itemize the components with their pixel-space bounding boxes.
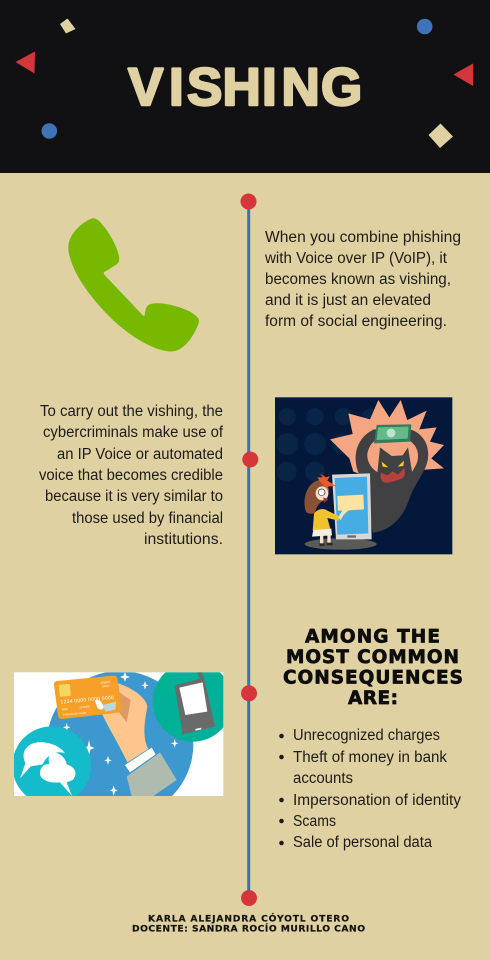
text block: how vishing works: voice that becomes credible (39, 467, 223, 484)
icon: blue circle left (42, 123, 57, 139)
text block: how vishing works: because it is very similar to (45, 488, 223, 505)
text block: how vishing works: cybercriminals make use of (43, 424, 224, 441)
illustration: scam monster behind phone (275, 397, 452, 554)
icon: red triangle left (16, 52, 35, 74)
illustration: hand holding credit card: CARDHOLDER NAME (62, 712, 87, 717)
heading: consequences: AMONG THE (305, 626, 440, 648)
monster head with ears (377, 447, 412, 490)
heading: consequences: MOST COMMON (286, 647, 459, 668)
list: consequences: Sale of personal data (293, 834, 432, 851)
list: consequences (279, 727, 461, 851)
illustration: hand holding credit card: 1234 0000 0000 0000 (60, 695, 114, 706)
text block: intro: and it is just an elevated (265, 292, 431, 309)
sleeve (127, 752, 177, 796)
illustration: hand holding credit card: CREDIT (100, 680, 111, 685)
heading: consequences: ARE: (348, 688, 398, 709)
list: consequences: Impersonation of identity (293, 792, 461, 809)
list: consequences: Unrecognized charges (293, 727, 440, 744)
teal circle with speech bubbles (14, 726, 91, 796)
hole between arms and head (367, 441, 418, 473)
mouth (381, 468, 405, 483)
list: consequences: accounts (293, 770, 353, 787)
list: consequences: Scams (293, 813, 336, 830)
illustration: hand holding credit card: CARD (102, 684, 110, 688)
text block: intro: form of social engineering. (265, 313, 447, 330)
text block: intro (264, 229, 461, 330)
footer credits: KARLA ALEJANDRA CÓYOTL OTERO (148, 912, 349, 924)
blue circle (49, 672, 194, 796)
footer credits (132, 912, 365, 934)
floor shadow (305, 538, 377, 550)
illustration: hand holding credit card (14, 672, 224, 796)
thumb (95, 699, 103, 710)
title: VISHING (128, 58, 362, 117)
text block: how vishing works: an IP Voice or automated (57, 446, 223, 463)
heading: consequences: CONSEQUENCES (283, 668, 463, 688)
text block: how vishing works: To carry out the vishing, the (40, 403, 223, 420)
sparkles (63, 672, 178, 796)
hand (102, 683, 148, 762)
icon: green telephone handset (68, 218, 199, 351)
card (54, 676, 122, 719)
icon: red triangle right (454, 64, 473, 86)
text block: intro: When you combine phishing (265, 229, 461, 246)
monster arms and body (356, 429, 428, 533)
list: consequences: Theft of money in bank (293, 749, 447, 766)
timeline (240, 194, 258, 906)
icon: cream diamond top left (60, 18, 76, 34)
illustration: hand holding credit card: 12/00/00 (79, 704, 90, 709)
woman (304, 480, 329, 514)
panel: header band (0, 0, 490, 173)
footer credits: DOCENTE: SANDRA ROCÍO MURILLO CANO (132, 922, 365, 934)
eyes (382, 462, 388, 467)
phone (332, 473, 372, 539)
heading: consequences (283, 626, 463, 709)
text block: intro: with Voice over IP (VoIP), it (264, 250, 448, 267)
starburst (330, 400, 444, 477)
icon: cream diamond right (428, 124, 453, 148)
banknote (374, 424, 411, 443)
illustration: hand holding credit card: 0000 (62, 707, 68, 711)
text block: how vishing works: institutions. (144, 531, 223, 548)
green circle with phone (152, 672, 224, 742)
text block: intro: becomes known as vishing, (265, 271, 451, 288)
text block: how vishing works: those used by financial (72, 510, 223, 527)
icon: blue circle right (417, 19, 433, 34)
text block: how vishing works (39, 403, 224, 548)
